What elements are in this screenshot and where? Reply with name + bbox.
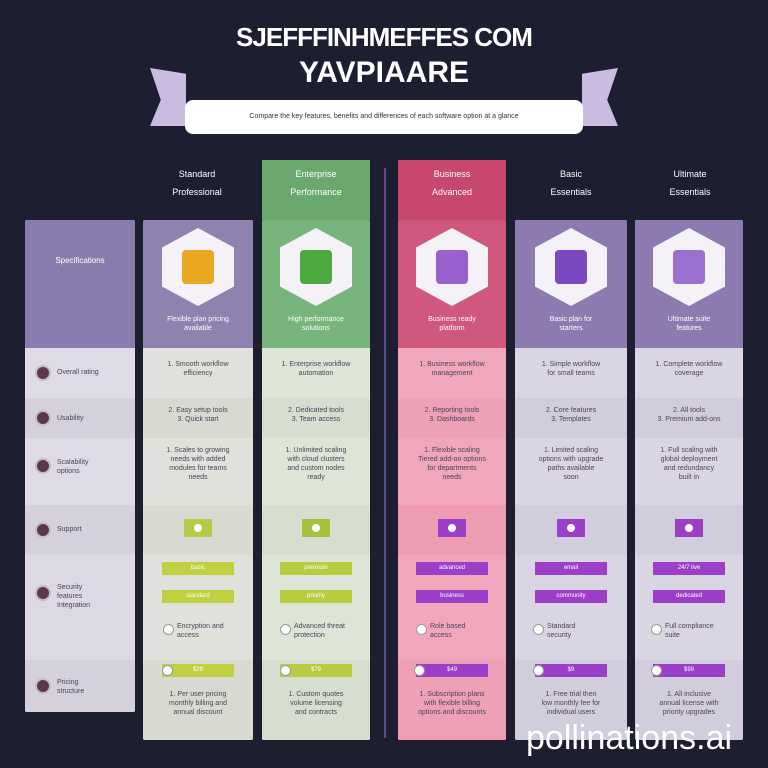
panel: column 5: 1. All inclusive	[667, 691, 711, 698]
panel: column 4: 1. Free trial then	[546, 691, 596, 698]
panel: column 3: advanced	[439, 565, 465, 571]
column headers: Essentials	[550, 187, 592, 197]
panel: column 4: security	[547, 632, 571, 639]
panel: column 3: platform	[439, 325, 465, 332]
panel: row labels: Scalability	[57, 459, 89, 466]
ribbon banner	[150, 68, 618, 134]
panel: column 5: 24/7 live	[678, 565, 700, 571]
panel: column 5: 3. Premium add-ons	[657, 416, 721, 423]
title: YAVPIAARE	[299, 56, 469, 89]
title	[236, 22, 532, 89]
panel: column 5: 1. Complete workflow	[656, 361, 722, 368]
column headers: Ultimate	[673, 169, 706, 179]
panel: column 4: individual users	[547, 709, 595, 716]
panel: row labels: Security	[57, 584, 82, 591]
panel: column 2: premium	[304, 565, 328, 571]
panel: column 3: Role based	[430, 623, 465, 630]
panel: row labels: Support	[57, 526, 82, 533]
subtitle bar	[185, 100, 583, 134]
panel: column 4: paths available	[548, 465, 594, 472]
panel: column 1: efficiency	[183, 370, 213, 377]
column headers: Performance	[290, 187, 342, 197]
panel: column 4	[515, 220, 627, 740]
panel: column 1: needs	[188, 474, 208, 481]
panel: column 2	[262, 220, 370, 740]
panel: column 3: Tiered add-on options	[418, 456, 486, 463]
panel: column 1: basic	[191, 565, 205, 571]
panel: column 1: 3. Quick start	[177, 416, 219, 423]
panel: column 1: 2. Easy setup tools	[168, 407, 228, 414]
panel: column 4: 1. Limited scaling	[544, 447, 598, 454]
column headers: Business	[434, 169, 470, 179]
panel: column 1: 1. Smooth workflow	[167, 361, 229, 368]
panel: column 5: priority upgrades	[663, 709, 715, 716]
panel: column 4: low monthly fee for	[542, 700, 600, 707]
panel: column 1: $29	[193, 667, 203, 673]
panel: column 3: management	[432, 370, 472, 377]
panel: column 3: Business ready	[428, 316, 476, 323]
panel: column 5: global deployment	[661, 456, 717, 463]
panel: column 2: with cloud clusters	[287, 456, 345, 463]
watermark: pollinations.ai	[526, 719, 732, 757]
panel: column 2: $79	[311, 667, 321, 673]
panel: row labels: structure	[57, 688, 84, 695]
panel: column 2: Advanced threat	[294, 623, 345, 630]
panel: column 3: access	[430, 632, 452, 639]
panel: column 2: High performance	[288, 316, 344, 323]
title: SJEFFFINHMEFFES COM	[236, 22, 532, 52]
panel: column 1: Flexible plan pricing	[167, 316, 229, 323]
panel: column 4: options with upgrade	[539, 456, 603, 463]
column headers	[172, 160, 711, 220]
panel: column 1: annual discount	[173, 709, 223, 716]
panel: column 2: 1. Unlimited scaling	[286, 447, 346, 454]
panel: column 5: Full compliance	[665, 623, 714, 630]
panel: column 3: options and discounts	[418, 709, 486, 716]
panel: column 3: 1. Business workflow	[419, 361, 485, 368]
panel: column 2: protection	[294, 632, 325, 639]
panel: column 3	[398, 220, 506, 740]
panel: column 3: business	[440, 593, 464, 599]
panel: column 1: 1. Per user pricing	[170, 691, 226, 698]
column headers: Essentials	[669, 187, 711, 197]
panel: column 2: solutions	[302, 325, 330, 332]
subtitle bar: Compare the key features, benefits and differences of each software option at a glance	[249, 113, 519, 120]
panel: column 2: ready	[307, 474, 325, 481]
panel: row labels	[25, 220, 135, 712]
panel: column 5: Ultimate suite	[668, 316, 710, 323]
panel: column 2: 1. Enterprise workflow	[282, 361, 350, 368]
panel: column 3: 1. Flexible scaling	[424, 447, 480, 454]
column headers: Professional	[172, 187, 222, 197]
panel: column 3: 2. Reporting tools	[425, 407, 479, 414]
panel: column 5: 1. Full scaling with	[660, 447, 718, 454]
panel: column 5: built in	[679, 474, 699, 481]
panel: row labels: Pricing	[57, 679, 78, 686]
panel: column 1: modules for teams	[169, 465, 227, 472]
panel: column 1: access	[177, 632, 199, 639]
panel: column 4: email	[564, 565, 578, 571]
divider	[384, 168, 386, 738]
panel: column 3: $49	[447, 667, 457, 673]
panel: column 5: annual license with	[659, 700, 719, 707]
panel: column 2: and contracts	[295, 709, 337, 716]
ribbon right end	[582, 68, 618, 126]
panel: column 4: Standard	[547, 623, 575, 630]
panel: column 1: Encryption and	[177, 623, 224, 630]
panel: column 2: 1. Custom quotes	[289, 691, 343, 698]
column headers: Advanced	[432, 187, 472, 197]
panel: column 4: for small teams	[547, 370, 595, 377]
panel: column 4: community	[556, 593, 586, 599]
panel: column 2: priority	[307, 593, 325, 599]
panel: column 1: available	[184, 325, 212, 332]
panel: column 5	[635, 220, 743, 740]
panel: column 5: features	[676, 325, 702, 332]
panel: column 5: suite	[665, 632, 680, 639]
panel: column 4: Basic plan for	[550, 316, 592, 323]
panel: column 1: standard	[186, 593, 210, 599]
column headers: Basic	[560, 169, 582, 179]
panel: column 2: 3. Team access	[292, 416, 340, 423]
panel: column 2: and custom nodes	[287, 465, 345, 472]
panel: column 4: $9	[568, 667, 574, 673]
panel: column 4: 3. Templates	[551, 416, 591, 423]
panel: column 3: needs	[442, 474, 462, 481]
panel: column 5: $99	[684, 667, 694, 673]
panel: column 2: volume licensing	[290, 700, 342, 707]
panel: row labels: Integration	[57, 602, 90, 609]
panel: column 3: 3. Dashboards	[429, 416, 475, 423]
panel: column 1	[143, 220, 253, 740]
panel: column 4: soon	[563, 474, 579, 481]
panel: column 2: automation	[299, 370, 333, 377]
panel: column 3: for departments	[427, 465, 477, 472]
panel: row labels: Specifications	[55, 256, 105, 265]
ribbon left end	[150, 68, 186, 126]
column headers: Enterprise	[295, 169, 337, 179]
panel: column 4: starters	[559, 325, 583, 332]
panel: column 1: monthly billing and	[169, 700, 227, 707]
panel: column 5: coverage	[675, 370, 703, 377]
column headers: Standard	[179, 169, 215, 179]
panel: column 2: 2. Dedicated tools	[288, 407, 344, 414]
panel: row labels: Usability	[57, 415, 83, 422]
panel: column 4: 2. Core features	[546, 407, 596, 414]
panel: column 1: needs with added	[171, 456, 225, 463]
panel: column 5: 2. All tools	[673, 407, 705, 414]
panel: row labels: Overall rating	[57, 369, 99, 376]
panel: column 3: with flexible billing	[424, 700, 480, 707]
panel: column 3: 1. Subscription plans	[420, 691, 484, 698]
panel: column 1: 1. Scales to growing	[166, 447, 230, 454]
panel: row labels: features	[57, 593, 82, 600]
panel: column 5: dedicated	[676, 593, 702, 599]
panel: row labels: options	[57, 468, 80, 475]
panel: column 4: 1. Simple workflow	[542, 361, 600, 368]
panel: column 5: and redundancy	[664, 465, 714, 472]
